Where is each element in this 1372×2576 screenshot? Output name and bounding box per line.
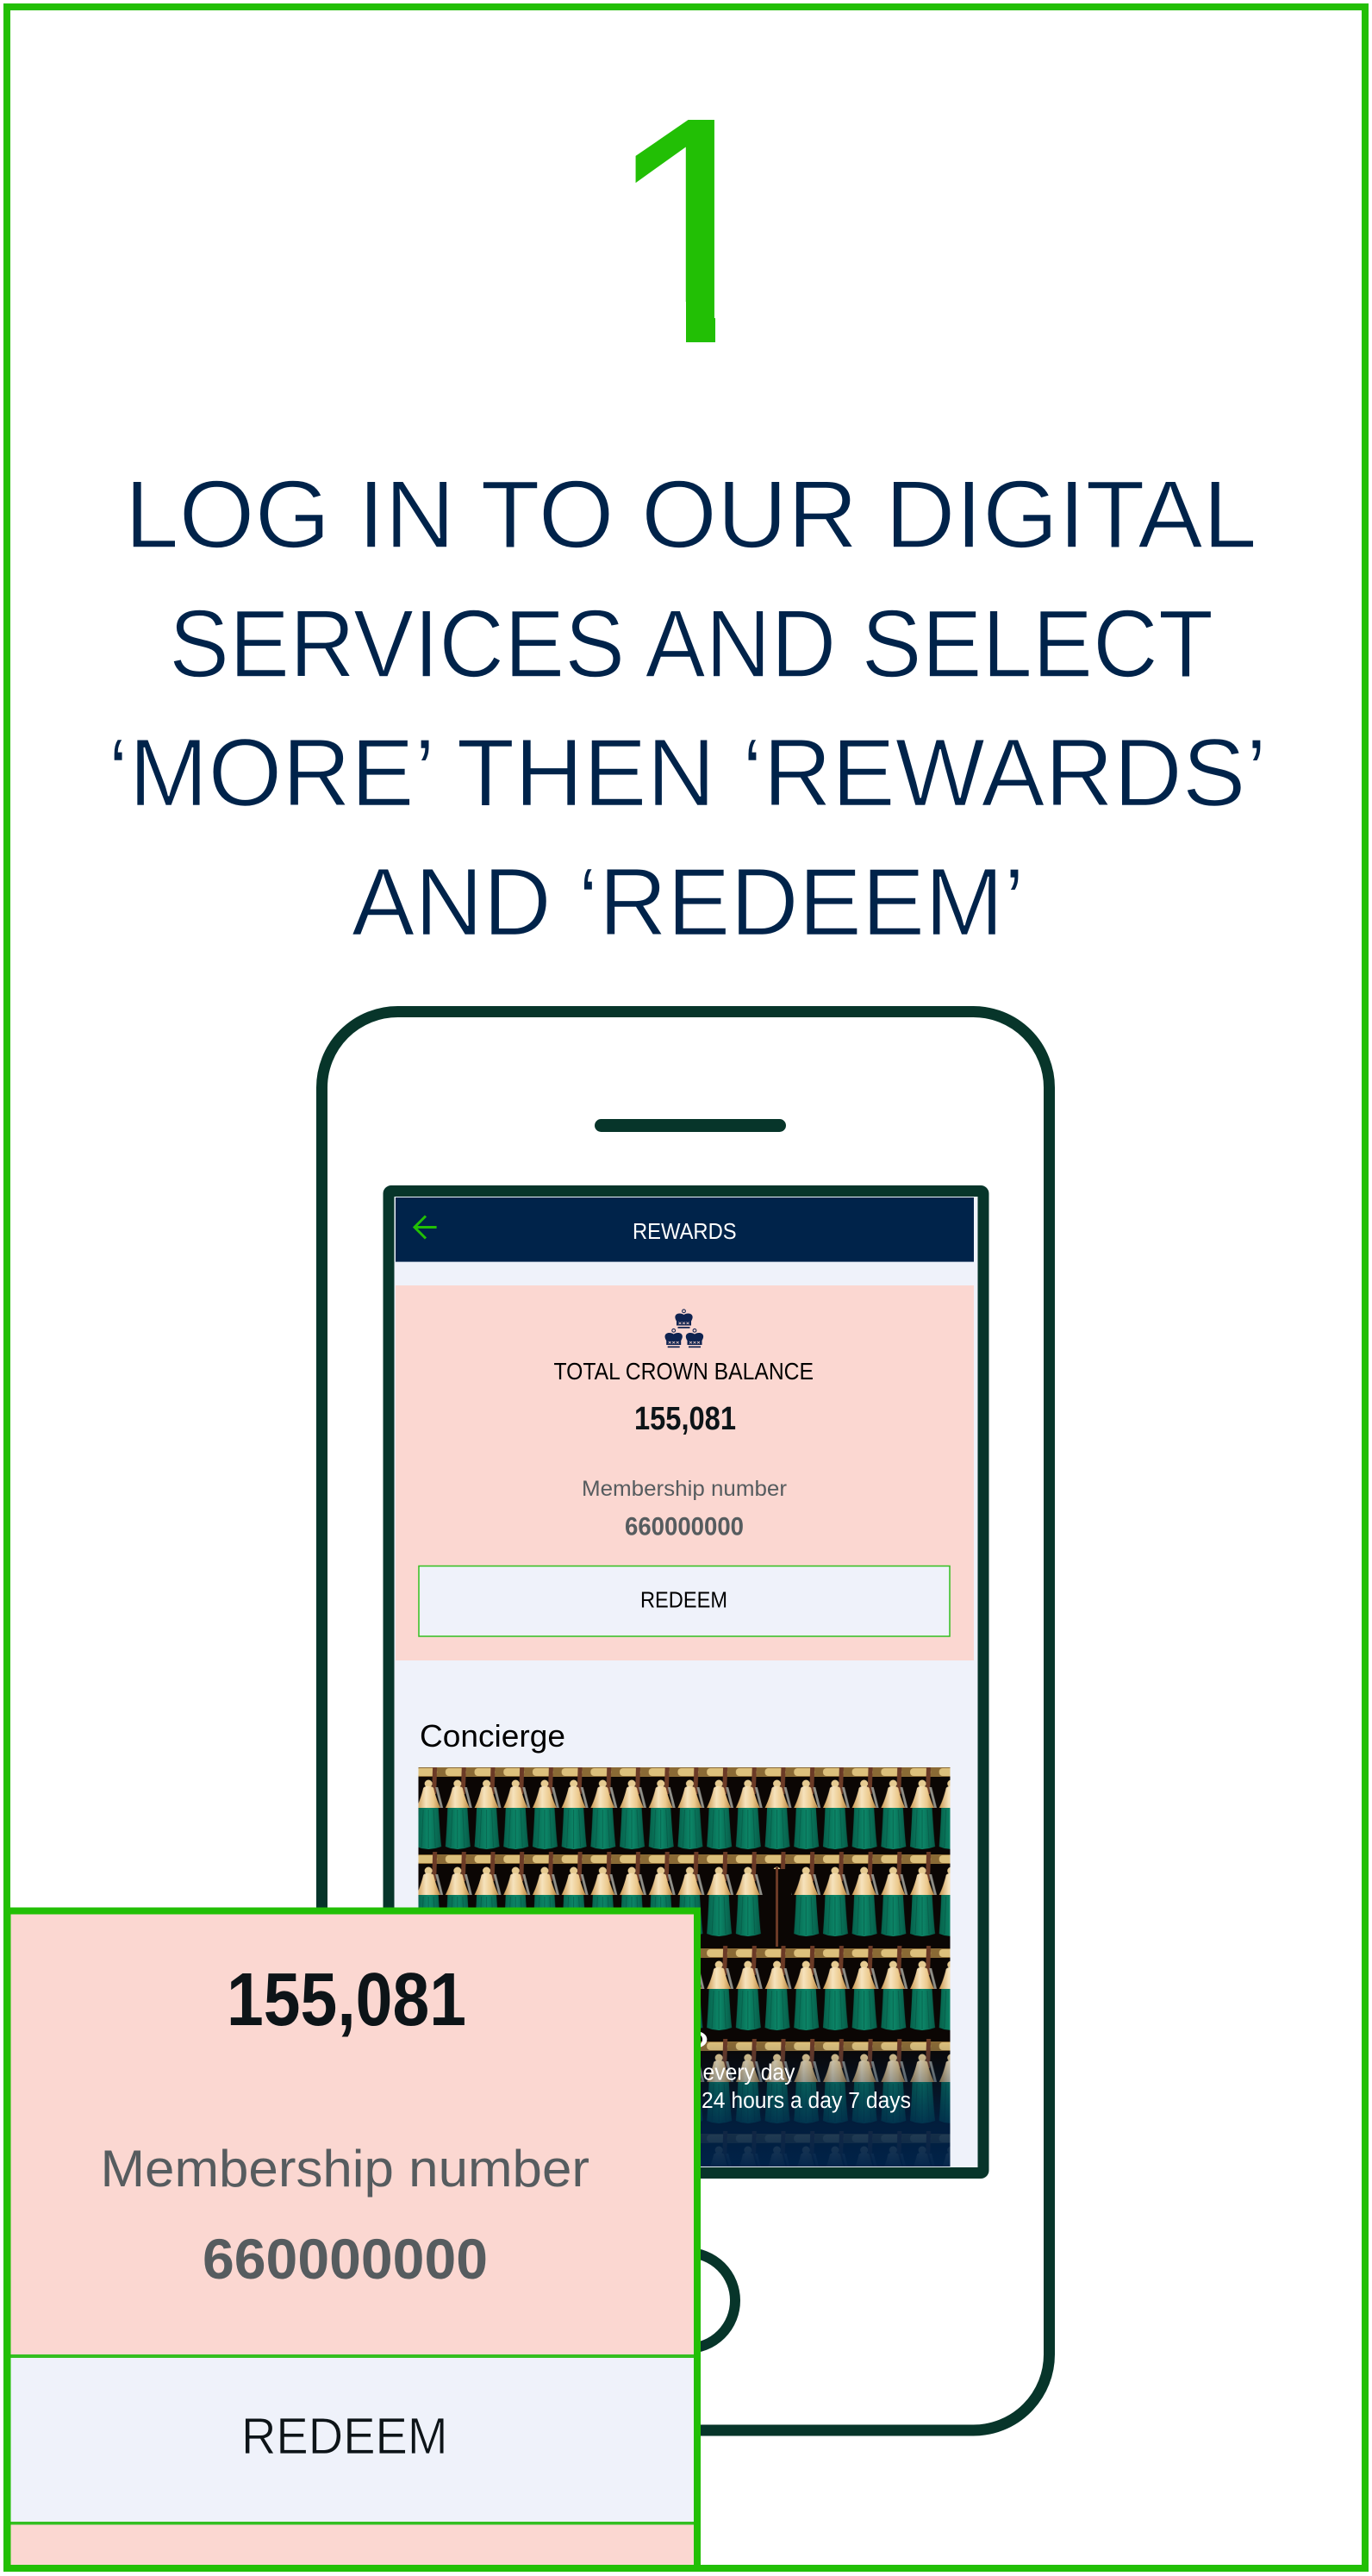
inset crown balance: 155,081 [227,1958,466,2041]
phone speaker [595,1119,786,1132]
phone body [322,1012,1050,2430]
enlarged inset panel [7,1910,697,2568]
app header bar [396,1197,974,1262]
crown balance panel: Membership number [582,1477,787,1501]
phone illustration [322,1012,1050,2430]
app header bar: REWARDS [633,1218,737,1244]
inset membership number: 660000000 [203,2227,488,2291]
inset membership label: Membership number [100,2140,589,2198]
concierge photo of key tassels: O [672,2026,709,2054]
heading: SERVICES AND SELECT [169,591,1213,697]
crown balance panel: 660000000 [625,1512,744,1541]
crown balance panel: TOTAL CROWN BALANCE [553,1358,814,1385]
heading: LOG IN TO OUR DIGITAL [125,461,1257,568]
crown balance panel: REDEEM [640,1586,727,1612]
inset redeem button: REDEEM [241,2408,448,2465]
concierge photo of key tassels [419,1767,950,2166]
crown balance panel [396,1285,974,1660]
phone home button [639,2253,735,2348]
crown balance panel: 155,081 [634,1401,736,1437]
heading [108,461,1267,955]
phone screen [389,1191,983,2173]
step number: 1 [605,51,784,411]
concierge photo of key tassels: 24 hours a day 7 days [702,2089,911,2113]
concierge heading: Concierge [420,1718,565,1754]
inset redeem button [10,2354,694,2524]
heading: ‘MORE’ THEN ‘REWARDS’ [108,719,1267,826]
concierge photo of key tassels: every day [703,2060,795,2085]
heading: AND ‘REDEEM’ [352,848,1025,955]
